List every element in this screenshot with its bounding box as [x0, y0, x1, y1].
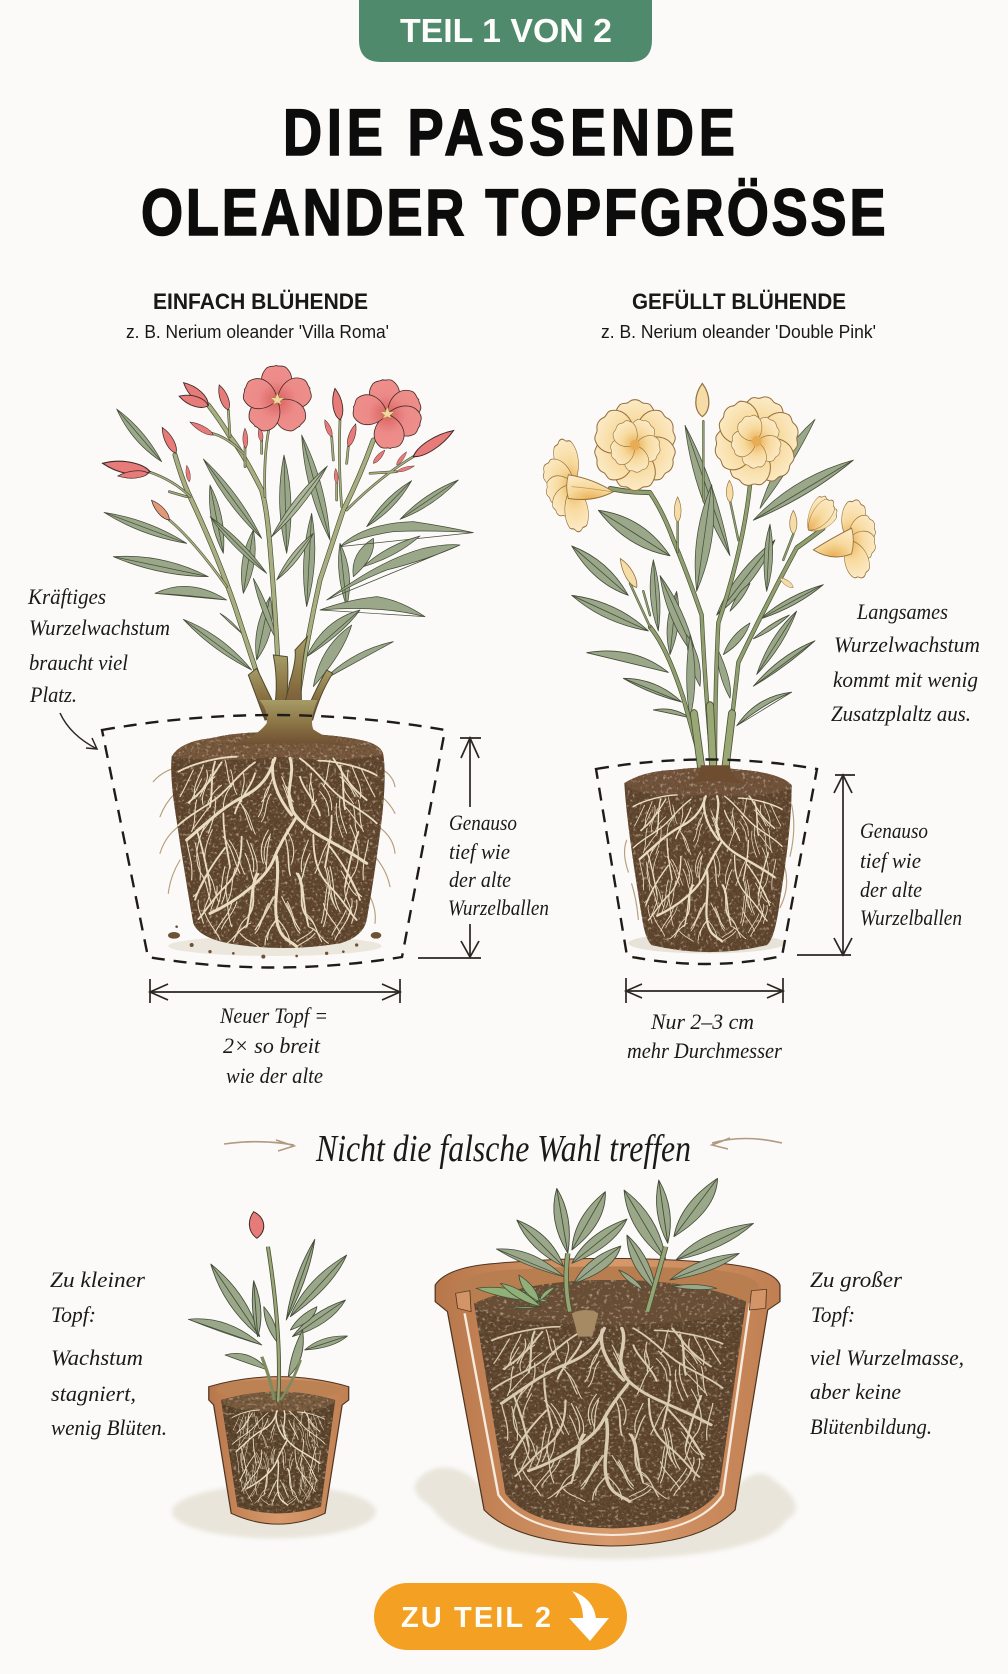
plant left [496, 1188, 627, 1283]
button: zu Teil 2: ZU TEIL 2 [401, 1602, 551, 1634]
label: Genauso tief (right): der alte [860, 877, 922, 902]
label: Langsames Wurzelwachstum: Langsames [856, 599, 948, 624]
label: Neuer Topf [219, 1003, 328, 1088]
label: Kräftiges Wurzelwachstum [27, 584, 170, 707]
label: Langsames Wurzelwachstum: Zusatzplaltz aus. [831, 701, 971, 726]
illustration: cream oleander plant [539, 383, 880, 771]
arrow: to pot outline [60, 713, 97, 749]
label: Langsames Wurzelwachstum: kommt mit wenig [833, 667, 978, 692]
label: Zu großer Topf [810, 1267, 964, 1439]
label: Genauso tief (left) [448, 810, 549, 920]
label: Zu kleiner Topf [50, 1267, 167, 1440]
back wall [458, 1266, 760, 1303]
heading: gefüllt blühende [601, 289, 876, 342]
dimension: width (right) [626, 978, 783, 1003]
label: Genauso tief (right) [860, 818, 962, 930]
soil crumbs on ground [168, 936, 382, 956]
label: Zu großer Topf: viel Wurzelmasse, [810, 1345, 964, 1370]
heading: einfach blühende [126, 289, 389, 342]
shadow [172, 1485, 376, 1538]
flower 2 [350, 378, 425, 450]
label: Kräftiges Wurzelwachstum: Kräftiges [27, 584, 106, 609]
label: Zu großer Topf: Topf: [811, 1302, 855, 1327]
label: Neuer Topf: wie der alte [226, 1063, 323, 1088]
illustration: root ball (double flowering) [624, 765, 794, 953]
stems [175, 405, 373, 713]
trumpet flower right [813, 496, 880, 583]
label: Nur 2-3 cm [627, 1009, 782, 1063]
inner wall line [465, 1303, 750, 1535]
label: Genauso tief (right): Genauso [860, 818, 928, 843]
label: Zu großer Topf: Zu großer [810, 1267, 902, 1292]
label: Genauso tief (left): der alte [449, 867, 511, 892]
label: Zu kleiner Topf: Zu kleiner [50, 1267, 145, 1292]
heading: Nicht die falsche Wahl treffen: Nicht die falsche Wahl treffen [315, 1128, 691, 1170]
illustration: too small pot [172, 1212, 376, 1538]
plant right [619, 1178, 753, 1290]
label: Genauso tief (right): Wurzelballen [860, 905, 962, 930]
dimension: width (left) [150, 979, 400, 1003]
hair roots [153, 768, 395, 923]
heading: einfach blühende: z. B. Nerium oleander 'Villa Roma' [126, 322, 389, 342]
dimension: depth (right) [797, 775, 855, 955]
title: DIE PASSENDE [283, 95, 735, 169]
illustration: pink oleander plant [102, 365, 473, 722]
soil [474, 1280, 746, 1528]
tab: Teil 1 von 2 [359, 0, 652, 62]
title: OLEANDER TOPFGRÖSSE [141, 175, 886, 249]
stems and leaves [188, 1239, 347, 1377]
dashed outline: new pot (left) [102, 715, 445, 968]
cream buds [617, 383, 797, 590]
leaves behind [104, 409, 473, 687]
label: Langsames Wurzelwachstum: Wurzelwachstum [834, 632, 980, 657]
pot outer [435, 1258, 780, 1546]
dashed outline: new pot (right) [596, 760, 817, 964]
label: Genauso tief (left): Genauso [449, 810, 517, 835]
trunk base [232, 700, 355, 747]
label: Kräftiges Wurzelwachstum: Wurzelwachstum [29, 615, 170, 640]
label: Genauso tief (right): tief wie [860, 848, 921, 873]
button: zu Teil 2 [374, 1583, 627, 1650]
label: Neuer Topf: 2× so breit [223, 1033, 321, 1058]
heading: einfach blühende: EINFACH BLÜHENDE [153, 289, 368, 314]
icon: curved arrow [569, 1591, 609, 1641]
label: Kräftiges Wurzelwachstum: braucht viel [29, 650, 128, 675]
roots [232, 1410, 325, 1505]
thick lower stems [694, 706, 732, 771]
roots [492, 1327, 723, 1501]
seedling [476, 1275, 556, 1309]
label: Genauso tief (left): tief wie [449, 839, 510, 864]
label: Kräftiges Wurzelwachstum: Platz. [29, 682, 77, 707]
rim cut faces [456, 1289, 766, 1312]
ball [171, 732, 385, 948]
leaves front [220, 466, 327, 633]
dimension: depth (left) [418, 738, 481, 958]
double flower 2 [710, 392, 803, 491]
label: Langsames Wurzelwachstum [831, 599, 980, 726]
title [141, 95, 886, 249]
heading: gefüllt blühende: GEFÜLLT BLÜHENDE [632, 289, 846, 314]
double flower 1 [588, 400, 682, 491]
label: Zu kleiner Topf: Topf: [51, 1302, 96, 1327]
label: Zu großer Topf: aber keine [810, 1379, 901, 1404]
label: Zu großer Topf: Blütenbildung. [810, 1414, 932, 1439]
soil [221, 1392, 335, 1513]
label: Zu kleiner Topf: wenig Blüten. [51, 1415, 167, 1440]
shadow [415, 1467, 796, 1559]
illustration: root ball with new pot outline (single flowering) [153, 700, 395, 959]
illustration: too large pot [415, 1178, 796, 1559]
label: Genauso tief (left): Wurzelballen [448, 895, 549, 920]
root crown [572, 1310, 598, 1337]
heading: gefüllt blühende: z. B. Nerium oleander 'Double Pink' [601, 322, 876, 342]
trunks [248, 637, 333, 722]
flower 1 [240, 365, 315, 436]
label: Zu kleiner Topf: Wachstum [51, 1345, 143, 1370]
label: Neuer Topf: Neuer Topf = [219, 1003, 328, 1028]
buds [102, 379, 456, 522]
label: Zu kleiner Topf: stagniert, [51, 1381, 136, 1406]
roots [178, 757, 377, 947]
label: Nur 2-3 cm: Nur 2–3 cm [650, 1009, 754, 1034]
pot body [209, 1377, 349, 1524]
trumpet flower left [539, 435, 613, 534]
half-open bud [796, 488, 844, 544]
label: Nur 2-3 cm: mehr Durchmesser [627, 1038, 782, 1063]
tab: Teil 1 von 2: TEIL 1 VON 2 [400, 12, 612, 49]
